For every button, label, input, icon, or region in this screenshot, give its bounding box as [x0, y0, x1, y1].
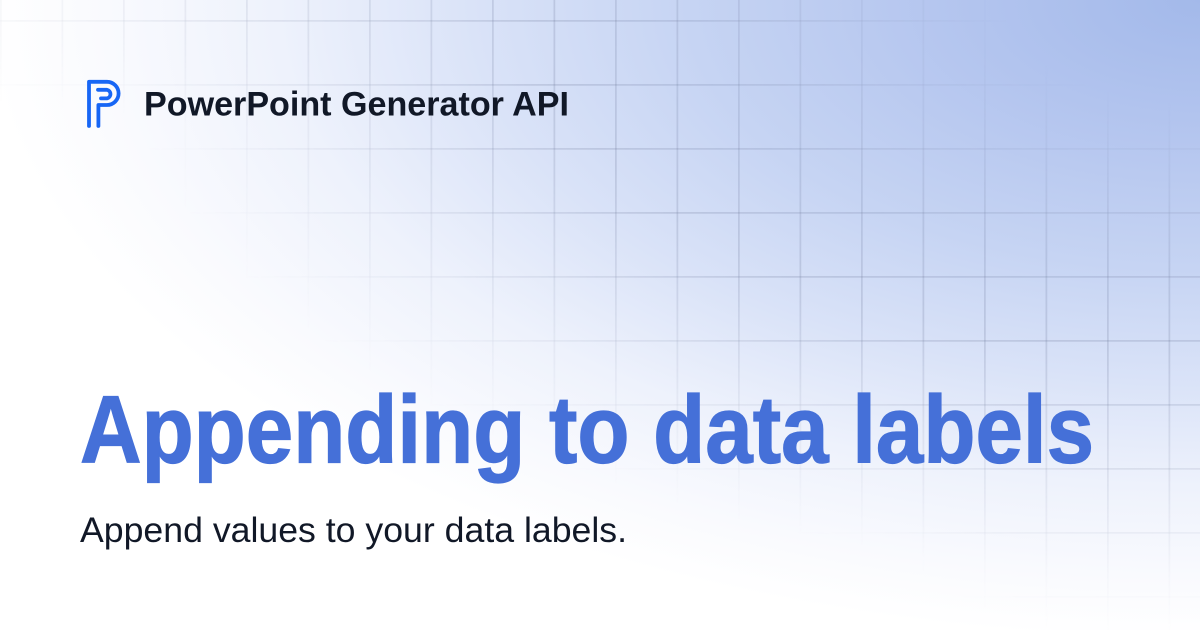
icon: PowerPoint Generator logo [89, 82, 119, 126]
title: Appending to data labels [80, 376, 1094, 484]
brand name: PowerPoint Generator API [144, 86, 569, 124]
subtitle: Append values to your data labels. [80, 510, 627, 550]
